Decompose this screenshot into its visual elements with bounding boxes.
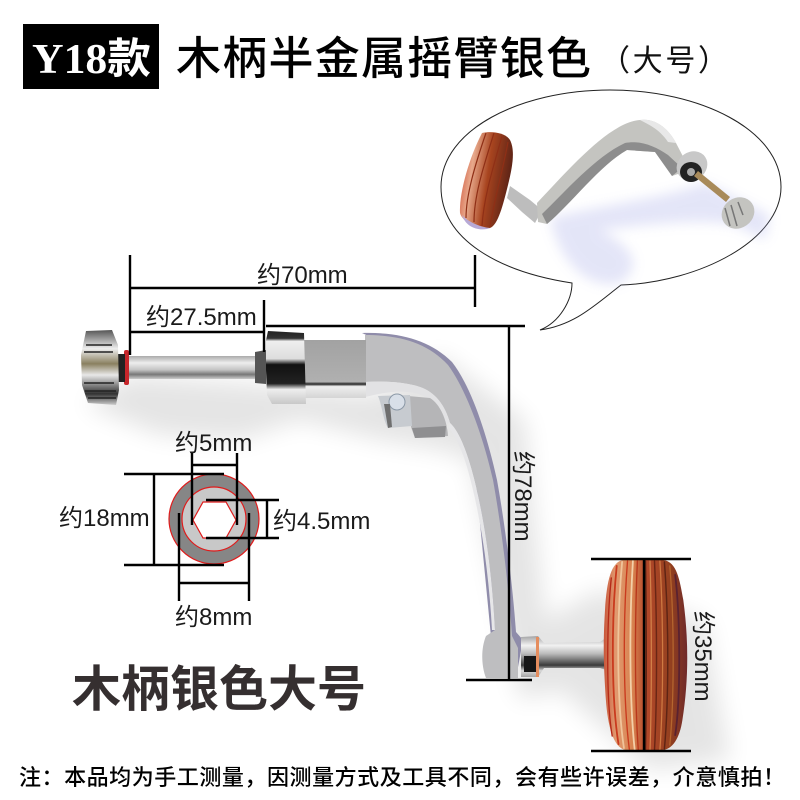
bracket and screw xyxy=(378,394,448,438)
dimension: 70mm: 约70mm xyxy=(257,262,348,289)
inset cast shadow xyxy=(550,182,770,284)
chrome collar xyxy=(265,331,306,404)
wooden grip xyxy=(604,560,687,750)
inset stem xyxy=(507,186,542,223)
inset collar xyxy=(671,145,713,187)
dimension: 4.5mm: 约4.5mm xyxy=(273,508,370,535)
title: 木柄半金属摇臂银色 xyxy=(176,22,591,87)
dimension: 18mm xyxy=(59,474,224,565)
dimension: 18mm: 约18mm xyxy=(59,505,150,532)
dimension: 27.5mm: 约27.5mm xyxy=(146,304,257,331)
drop shadow xyxy=(85,355,730,770)
hex socket cross-section xyxy=(169,474,259,564)
main handle photo xyxy=(81,330,730,770)
bubble outline xyxy=(441,90,781,330)
dimension: 78mm: 约78mm xyxy=(509,451,536,542)
speech bubble inset xyxy=(441,90,781,330)
dimension: 5mm xyxy=(175,430,252,525)
footnote: 注：本品均为手工测量，因测量方式及工具不同，会有些许误差，介意慎拍！ xyxy=(19,760,785,792)
dimension: 35mm xyxy=(591,559,716,751)
dimension: 27.5mm xyxy=(130,300,264,352)
dimension: 35mm: 约35mm xyxy=(689,611,716,702)
dimension: 4.5mm xyxy=(206,500,370,538)
dimension: 8mm xyxy=(175,513,252,631)
dimension: 70mm xyxy=(130,255,475,355)
title badge xyxy=(23,24,159,89)
title: （大号） xyxy=(600,36,728,80)
product label: 木柄银色大号 xyxy=(72,650,366,721)
red washer xyxy=(124,350,129,385)
crank arm xyxy=(362,333,523,678)
wood knob ferrule xyxy=(521,635,612,677)
title badge: Y18款 xyxy=(32,36,151,83)
inset crank arm xyxy=(537,120,690,224)
inset wooden grip xyxy=(460,132,513,229)
dimension: 8mm: 约8mm xyxy=(175,604,252,631)
knurled knob xyxy=(81,330,119,405)
inset shaft and knob xyxy=(694,171,761,235)
dimension: 5mm: 约5mm xyxy=(175,430,252,457)
square neck xyxy=(304,340,366,398)
dimension: 78mm xyxy=(266,326,536,680)
hex shaft xyxy=(128,350,266,384)
